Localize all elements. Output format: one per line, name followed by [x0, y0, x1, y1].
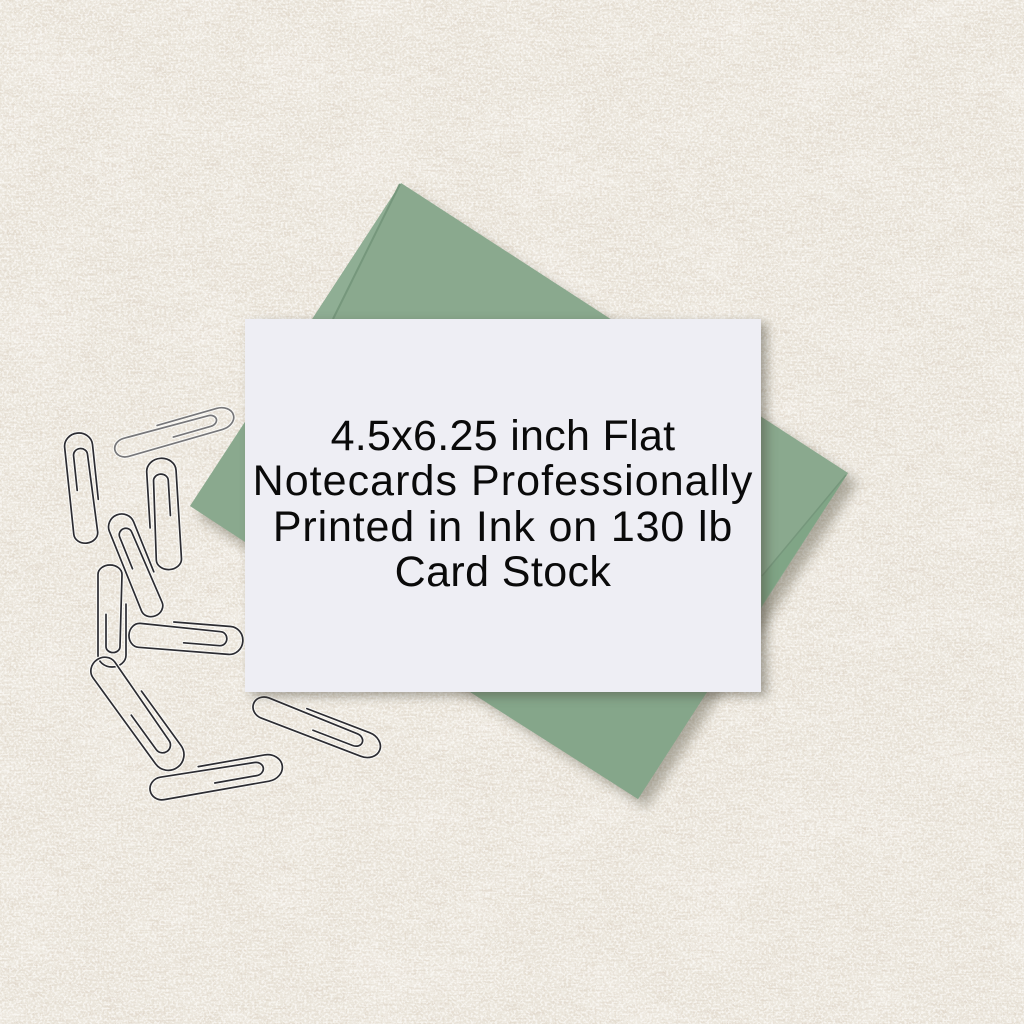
paper clip: diagonal centre — [105, 510, 169, 620]
fold line: top — [333, 184, 400, 319]
card caption: Notecards Professionally — [253, 457, 753, 505]
left flap band — [312, 183, 401, 320]
card caption: 4.5x6.25 inch Flat — [331, 412, 675, 460]
envelope body — [190, 183, 848, 799]
green envelope — [190, 183, 858, 808]
right fold wedge — [762, 473, 848, 605]
paper clip: bottom — [148, 752, 284, 802]
paper clip: lower left vertical — [98, 565, 126, 667]
card caption: Printed in Ink on 130 lb — [273, 503, 733, 551]
paper clip: long diagonal — [86, 649, 190, 777]
paper clip: tucked under card, bottom — [250, 690, 384, 762]
white notecard — [245, 319, 761, 692]
card caption — [253, 412, 753, 596]
lower envelope panel — [470, 692, 707, 799]
paper clip: upper middle vertical — [146, 457, 182, 571]
card caption: Card Stock — [395, 548, 611, 596]
fold line: right — [762, 475, 846, 576]
paper clip: far left — [63, 432, 103, 544]
envelope drop shadow — [198, 192, 858, 808]
paper clip: tucked under card, left — [128, 619, 244, 655]
paper clip: top horizontal — [112, 404, 236, 460]
